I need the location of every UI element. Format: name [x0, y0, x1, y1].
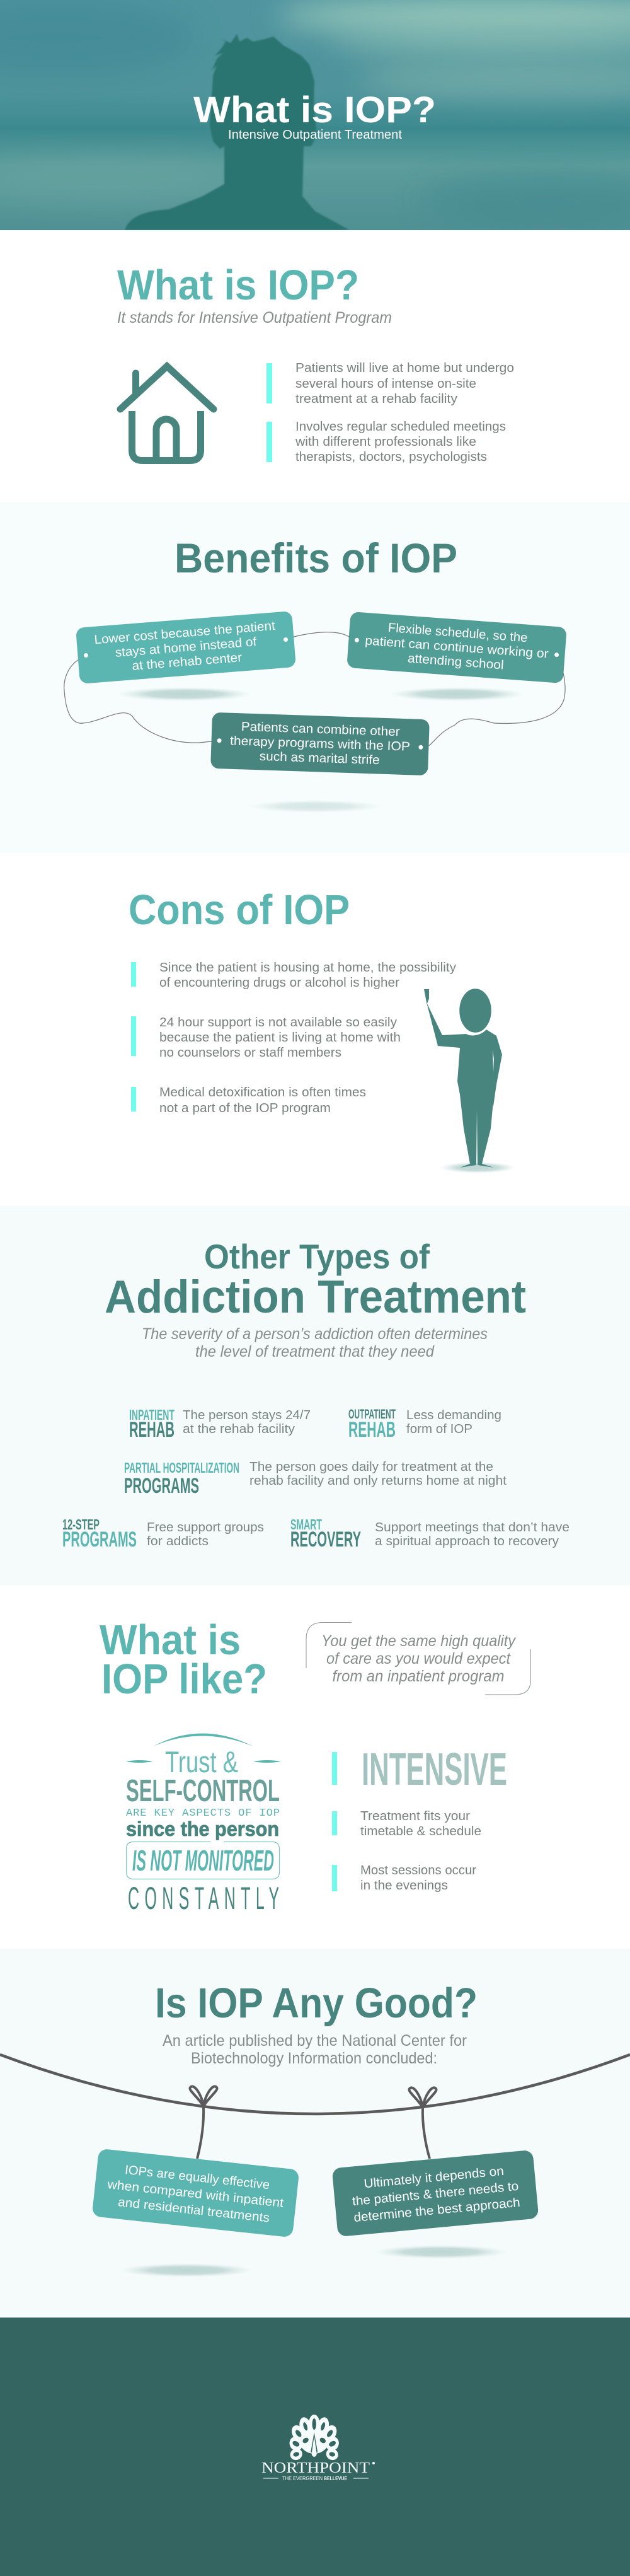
quote text: [321, 1632, 516, 1685]
card: equally effective: IOPs are equally effective: [124, 2163, 270, 2192]
item: smart recovery: RECOVERY: [290, 1528, 361, 1552]
text: no 24 hour support: because the patient is living at home with: [159, 1031, 401, 1045]
logo wordmark: NORTHPOINT: [261, 2460, 370, 2476]
silhouette of person: [125, 34, 350, 230]
shadow: [120, 2263, 253, 2277]
typographic quote: trust and self-control: since the person: [126, 1818, 279, 1840]
text: evenings: Most sessions occur: [360, 1864, 476, 1877]
card: lower cost: stays at home instead of: [115, 635, 257, 660]
subheading: An article published by the National Center for: [163, 2032, 467, 2050]
item: inpatient rehab: at the rehab facility: [183, 1422, 295, 1436]
panel: is IOP any good: [0, 1949, 630, 2318]
item: outpatient rehab: Less demanding: [406, 1408, 501, 1422]
item: smart recovery: Support meetings that don’t have: [375, 1521, 570, 1535]
heading: Benefits of IOP: [175, 535, 457, 581]
accent bar: [131, 962, 136, 987]
heading: Is IOP Any Good?: [155, 1980, 478, 2027]
panel: hero banner: [0, 0, 630, 230]
item: 12-step programs: PROGRAMS: [62, 1528, 137, 1552]
panel: footer: [0, 2318, 630, 2576]
card: flexible schedule: patient can continue working or: [365, 634, 549, 661]
subheading: [142, 1325, 488, 1361]
card: lower cost: [76, 611, 296, 684]
typographic quote: trust and self-control: ARE KEY ASPECTS OF IOP: [126, 1807, 280, 1819]
bow and string: [409, 2087, 437, 2159]
card: equally effective: [92, 2149, 299, 2237]
quote text: from an inpatient program: [333, 1668, 504, 1685]
heading: [100, 1616, 267, 1703]
panel: what is IOP: [0, 230, 630, 502]
text: timetable: Treatment fits your: [360, 1809, 470, 1823]
card: ultimately depends: the patients & there needs to: [352, 2179, 519, 2208]
hero subtitle: Intensive Outpatient Treatment: [228, 128, 402, 142]
shadow: [118, 687, 251, 701]
icon: house: [120, 366, 214, 460]
registered mark: [372, 2462, 375, 2464]
text: home treatment: [295, 361, 514, 406]
accent bar: [131, 1016, 136, 1056]
typographic quote: trust and self-control: Trust &: [165, 1745, 238, 1778]
text: timetable: [360, 1809, 481, 1838]
subheading: It stands for Intensive Outpatient Program: [117, 309, 392, 327]
typographic quote: trust and self-control: IS NOT MONITORED: [132, 1844, 274, 1877]
shadow: [391, 687, 524, 701]
item: partial hospitalization programs: [124, 1459, 507, 1498]
item: 12-step programs: 12-STEP: [62, 1516, 100, 1533]
text: meetings: with different professionals like: [295, 435, 476, 449]
shadow: [248, 800, 382, 813]
logo tagline: [263, 2475, 369, 2481]
item: 12-step programs: Free support groups: [147, 1521, 264, 1535]
item: outpatient rehab: [348, 1407, 501, 1442]
card: ultimately depends: Ultimately it depends on: [364, 2164, 505, 2191]
quote text: of care as you would expect: [326, 1650, 511, 1668]
card: equally effective: when compared with inpatient: [106, 2178, 285, 2210]
accent bar: [332, 1752, 337, 1785]
card: combine programs: therapy programs with the IOP: [230, 734, 410, 754]
panel: cons of IOP: [0, 853, 630, 1206]
text: evenings: [360, 1864, 476, 1893]
quote bracket: [306, 1623, 530, 1695]
accent bar: [266, 363, 272, 403]
text: detoxification: Medical detoxification is often times: [159, 1086, 366, 1099]
typographic quote: trust and self-control: [126, 1734, 281, 1916]
hero sky and sea background: [0, 0, 630, 227]
card: flexible schedule: [346, 612, 567, 683]
card: combine programs: [210, 712, 430, 775]
figure: person raising arm: [424, 988, 502, 1168]
text: home treatment: Patients will live at home but undergo: [295, 361, 514, 375]
card: lower cost: at the rehab center: [132, 651, 243, 673]
item: inpatient rehab: The person stays 24/7: [183, 1408, 311, 1422]
text: no 24 hour support: [159, 1016, 401, 1060]
text: encountering drugs: Since the patient is housing at home, the possibility: [159, 961, 456, 975]
card: ultimately depends: [332, 2150, 539, 2237]
panel: other types of addiction treatment: [0, 1206, 630, 1585]
item: 12-step programs: [62, 1516, 264, 1552]
item: smart recovery: [290, 1516, 570, 1552]
subheading: [163, 2032, 467, 2067]
text: meetings: therapists, doctors, psychologists: [295, 450, 487, 464]
accent bar: [131, 1087, 136, 1111]
connecting wire: [64, 632, 565, 747]
card: lower cost: Lower cost because the patient: [94, 619, 276, 647]
text: detoxification: not a part of the IOP program: [159, 1101, 331, 1115]
item: 12-step programs: for addicts: [147, 1535, 209, 1548]
heading: Addiction Treatment: [105, 1272, 526, 1323]
logo tagline: BELLEVUE: [324, 2475, 347, 2481]
typographic quote: trust and self-control: SELF-CONTROL: [126, 1774, 280, 1808]
bow and string: [190, 2086, 217, 2159]
subheading: the level of treatment that they need: [195, 1343, 435, 1361]
item: smart recovery: a spiritual approach to recovery: [375, 1535, 559, 1548]
text: evenings: in the evenings: [360, 1879, 448, 1893]
hero title: What is IOP?: [193, 90, 436, 131]
accent bar: [332, 1811, 337, 1835]
logo: northpoint peacock: [288, 2415, 340, 2461]
item: partial hospitalization programs: The person goes daily for treatment at the: [249, 1460, 493, 1474]
shadow: [374, 2245, 508, 2259]
heading: What is IOP?: [117, 262, 359, 309]
card: flexible schedule: attending school: [407, 651, 504, 673]
item: inpatient rehab: REHAB: [129, 1418, 175, 1442]
item: outpatient rehab: REHAB: [348, 1418, 396, 1442]
quote text: You get the same high quality: [321, 1632, 516, 1650]
text: encountering drugs: of encountering drugs or alcohol is higher: [159, 976, 399, 990]
item: outpatient rehab: OUTPATIENT: [348, 1407, 396, 1422]
item: partial hospitalization programs: PROGRAMS: [124, 1474, 199, 1498]
panel: what is IOP like: [0, 1585, 630, 1949]
item: smart recovery: SMART: [290, 1516, 322, 1533]
item: partial hospitalization programs: rehab facility and only returns home at night: [249, 1474, 507, 1488]
text: detoxification: [159, 1086, 366, 1115]
heading: [105, 1237, 526, 1323]
subheading: The severity of a person’s addiction often determines: [142, 1325, 488, 1343]
heading: What is: [100, 1616, 241, 1664]
text: timetable: timetable & schedule: [360, 1825, 481, 1838]
card: ultimately depends: determine the best approach: [353, 2196, 520, 2225]
text: no 24 hour support: 24 hour support is not available so easily: [159, 1016, 397, 1030]
clothes line rope: [0, 2055, 630, 2114]
word: intensive: INTENSIVE: [362, 1744, 507, 1795]
card: combine programs: such as marital strife: [259, 750, 380, 767]
card: combine programs: Patients can combine other: [241, 720, 400, 739]
typographic quote: trust and self-control: CONSTANTLY: [128, 1881, 279, 1916]
text: meetings: Involves regular scheduled meetings: [295, 420, 506, 434]
text: encountering drugs: [159, 961, 456, 990]
item: inpatient rehab: [129, 1407, 311, 1442]
shadow: [440, 1162, 515, 1173]
logo tagline: THE EVERGREEN: [282, 2475, 323, 2481]
accent bar: [266, 422, 272, 462]
heading: Other Types of: [204, 1237, 430, 1276]
panel: benefits of IOP: [0, 502, 630, 853]
subheading: Biotechnology Information concluded:: [191, 2050, 437, 2067]
text: no 24 hour support: no counselors or staff members: [159, 1046, 341, 1060]
text: home treatment: several hours of intense on-site: [295, 377, 476, 391]
item: inpatient rehab: INPATIENT: [129, 1407, 175, 1423]
heading: Cons of IOP: [129, 886, 350, 934]
item: outpatient rehab: form of IOP: [406, 1422, 472, 1436]
card: flexible schedule: Flexible schedule, so the: [387, 621, 528, 645]
text: home treatment: treatment at a rehab facility: [295, 392, 457, 406]
text: meetings: [295, 420, 506, 464]
item: partial hospitalization programs: PARTIAL HOSPITALIZATION: [124, 1459, 239, 1476]
heading: IOP like?: [101, 1656, 267, 1703]
accent bar: [332, 1865, 337, 1891]
card: equally effective: and residential treatments: [117, 2195, 270, 2225]
